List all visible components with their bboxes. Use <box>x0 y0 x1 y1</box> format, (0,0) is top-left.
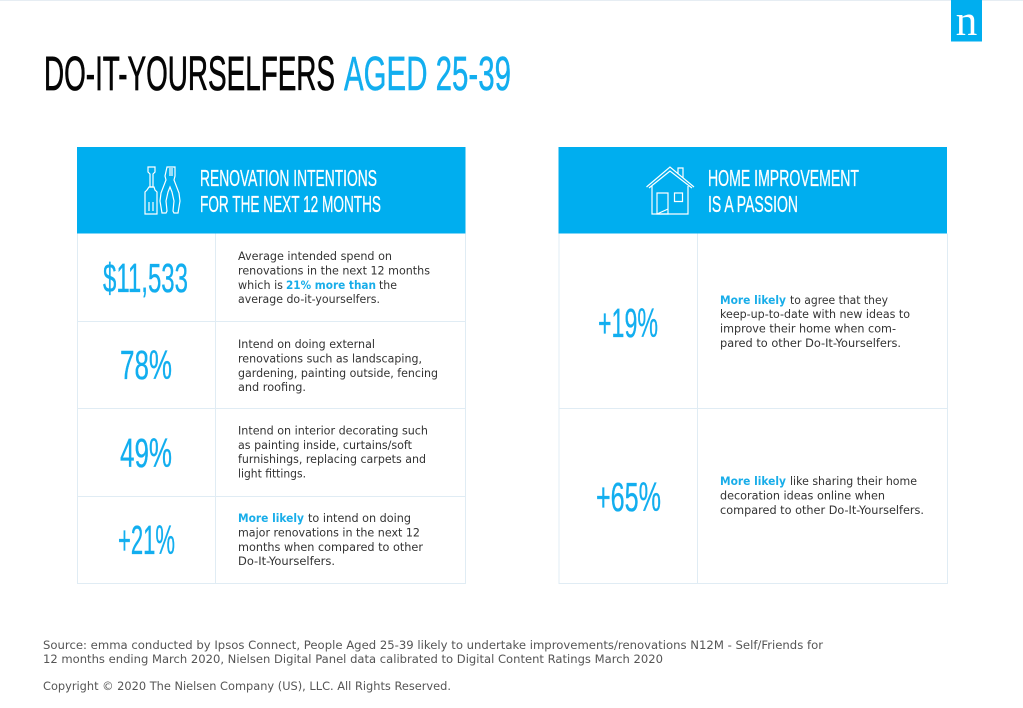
row: 78%: and roofing. <box>238 380 306 394</box>
icon: house <box>646 167 694 214</box>
panel header: renovation intentions <box>77 147 466 234</box>
row: +19%: keep-up-to-date with new ideas to <box>720 307 910 321</box>
row: +21%: months when compared to other <box>238 540 423 554</box>
row: $11,533: renovations in the next 12 months <box>238 264 430 278</box>
header text <box>200 165 381 217</box>
row: +65% <box>596 474 924 520</box>
row: +65%: compared to other Do-It-Yourselfers. <box>720 503 924 517</box>
row: +19%: More likely <box>720 293 786 307</box>
copyright: Copyright © 2020 The Nielsen Company (US), LLC. All Rights Reserved. <box>43 679 451 693</box>
row: +21%: More likely <box>238 511 304 525</box>
header text <box>708 165 859 217</box>
icon: screwdriver and pliers <box>145 167 180 214</box>
row: +21%: to intend on doing <box>308 511 411 525</box>
panel header: home improvement <box>558 147 947 234</box>
source note: 12 months ending March 2020, Nielsen Digital Panel data calibrated to Digital Content Ratings March 2020 <box>43 652 663 666</box>
row: +65%: +65% <box>596 474 661 520</box>
row: 49%: as painting inside, curtains/soft <box>238 438 412 452</box>
row: +21%: +21% <box>118 517 175 563</box>
row: +19%: improve their home when com- <box>720 322 896 336</box>
row: $11,533: the <box>379 278 397 292</box>
row: $11,533: 21% more than <box>286 278 376 292</box>
row: +19%: pared to other Do-It-Yourselfers. <box>720 336 901 350</box>
row: +19% <box>598 293 910 350</box>
title: AGED 25-39 <box>344 48 511 101</box>
row: +65%: More likely <box>720 474 786 488</box>
row: $11,533: $11,533 <box>103 255 188 301</box>
row: 49% <box>120 424 428 480</box>
row: $11,533: Average intended spend on <box>238 249 392 263</box>
logo: Nielsen n <box>951 0 982 45</box>
row: $11,533: average do-it-yourselfers. <box>238 292 380 306</box>
header text: HOME IMPROVEMENT <box>708 165 859 191</box>
row: 78%: renovations such as landscaping, <box>238 352 422 366</box>
row: +65%: decoration ideas online when <box>720 488 885 502</box>
row: +21% <box>118 511 423 568</box>
row: 49%: light fittings. <box>238 466 306 480</box>
header text: FOR THE NEXT 12 MONTHS <box>200 191 381 217</box>
header text: IS A PASSION <box>708 191 798 217</box>
row: +21%: Do-It-Yourselfers. <box>238 554 335 568</box>
row: 78%: Intend on doing external <box>238 337 375 351</box>
panel: home improvement <box>558 147 948 584</box>
row: +65%: like sharing their home <box>790 474 917 488</box>
table grid <box>78 234 466 584</box>
row: +19%: to agree that they <box>790 293 888 307</box>
title: DO-IT-YOURSELFERS <box>44 48 335 101</box>
row: +21%: major renovations in the next 12 <box>238 526 420 540</box>
row: 78%: gardening, painting outside, fencing <box>238 366 438 380</box>
row: $11,533: which is <box>238 278 283 292</box>
row: $11,533 <box>103 249 430 306</box>
table grid <box>559 234 948 584</box>
header text: RENOVATION INTENTIONS <box>200 165 377 191</box>
source note: Source: emma conducted by Ipsos Connect, People Aged 25-39 likely to undertake improvements/renovations N12M - Self/Friends for <box>43 638 823 652</box>
panel: renovation intentions <box>77 147 466 584</box>
row: 78% <box>120 337 438 394</box>
row: 49%: 49% <box>120 430 172 476</box>
source note <box>43 638 823 666</box>
row: +19%: +19% <box>598 300 658 346</box>
row: 78%: 78% <box>120 342 172 388</box>
row: 49%: furnishings, replacing carpets and <box>238 452 426 466</box>
row: 49%: Intend on interior decorating such <box>238 424 428 438</box>
